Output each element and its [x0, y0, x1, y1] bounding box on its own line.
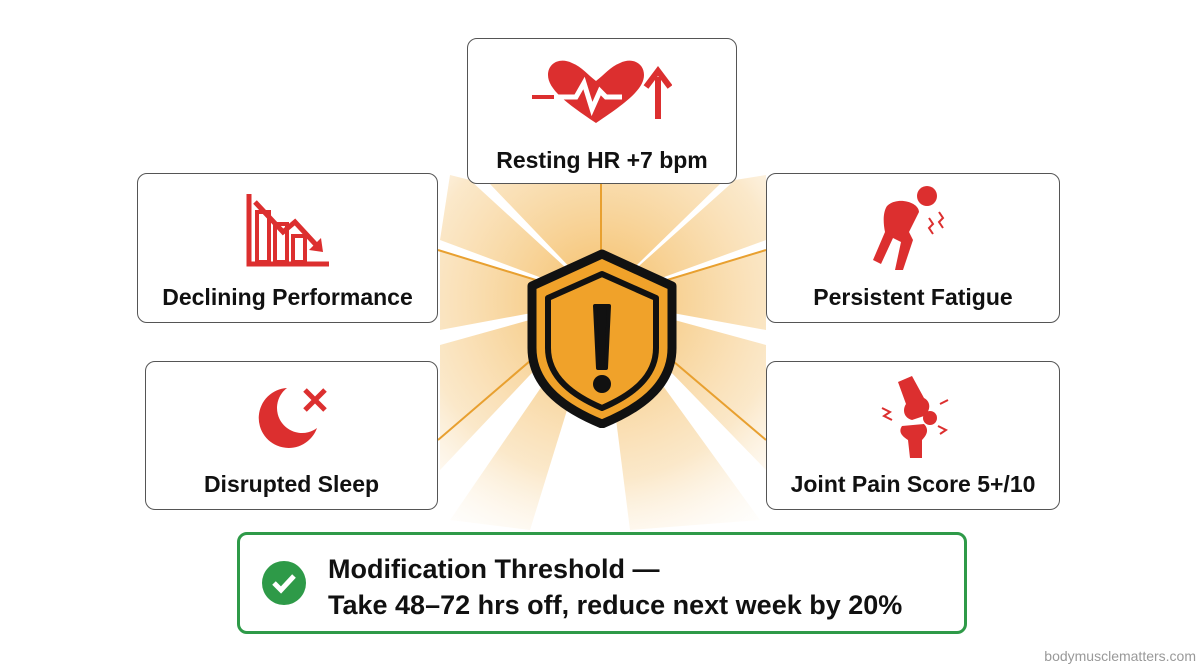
icon: broken joint: [882, 376, 948, 458]
callout: modification threshold: [237, 532, 967, 634]
watermark: bodymusclematters.com: [1044, 648, 1196, 664]
shield icon: [528, 250, 676, 428]
panel: disrupted sleep: [145, 361, 438, 510]
panel: declining performance: Declining Performance: [162, 284, 413, 310]
panel: persistent fatigue: [766, 173, 1060, 323]
icon: heart with arrow: [532, 60, 672, 123]
panel: persistent fatigue: Persistent Fatigue: [813, 284, 1013, 310]
icon: declining chart: [246, 194, 329, 266]
panel: resting HR: Resting HR +7 bpm: [496, 147, 708, 173]
panel: joint pain: Joint Pain Score 5+/10: [791, 471, 1035, 497]
panel: resting HR: [467, 38, 737, 184]
icon: tired person: [873, 186, 944, 270]
icon: green check: [262, 561, 306, 605]
icon: moon with x: [258, 388, 327, 448]
panel: joint pain: [766, 361, 1060, 510]
panel: disrupted sleep: Disrupted Sleep: [204, 471, 379, 497]
panel: declining performance: [137, 173, 438, 323]
callout: modification threshold: Modification Threshold —: [328, 554, 660, 584]
callout: modification threshold: Take 48–72 hrs off, reduce next week by 20%: [328, 590, 902, 620]
